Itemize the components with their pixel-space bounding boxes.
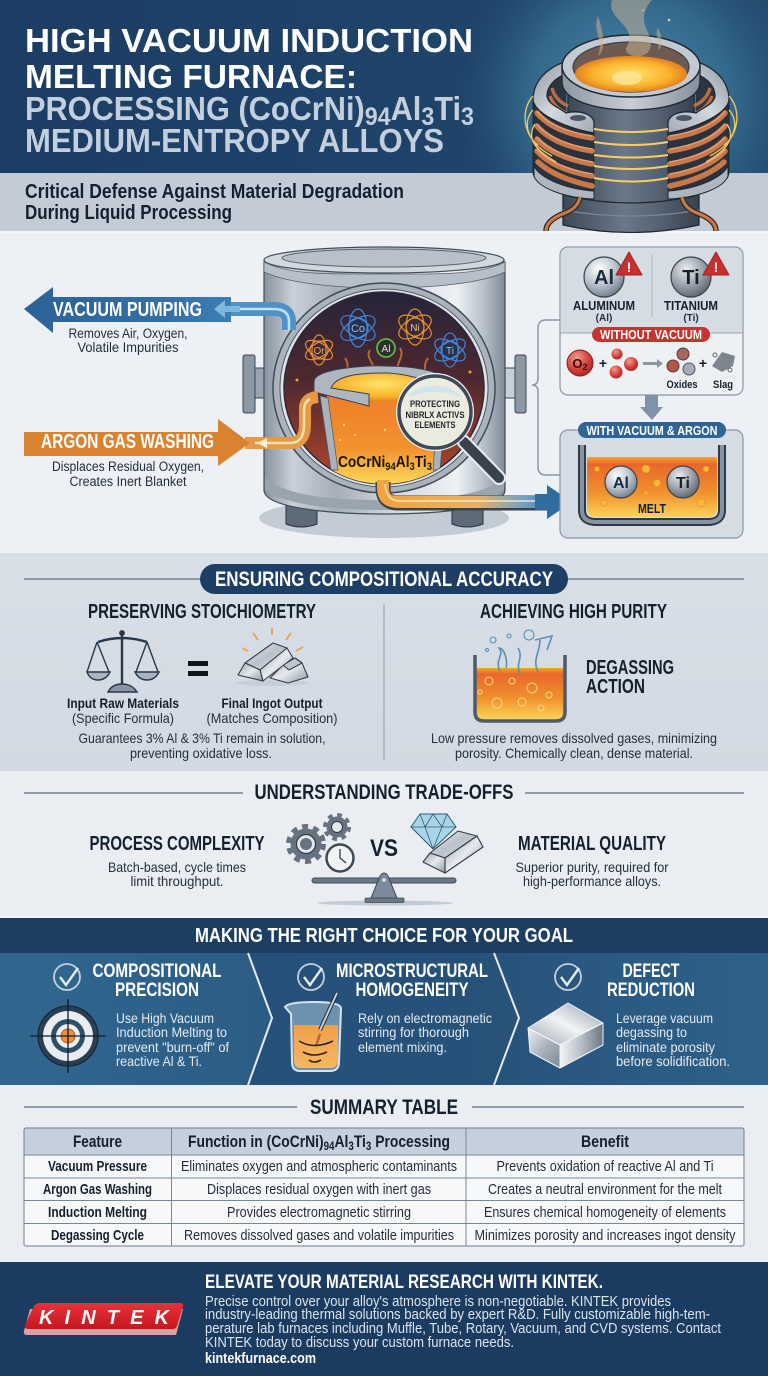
card: defect reduction: eliminate porosity — [616, 1039, 715, 1055]
crucible with melt: Al — [613, 475, 629, 492]
table header — [73, 1132, 629, 1153]
row: vacuum pressure: Prevents oxidation of reactive Al and Ti — [496, 1158, 714, 1175]
icon: diamond and ingot — [411, 814, 483, 873]
icon: silver ingots — [236, 628, 308, 686]
atom: Al: Al — [382, 344, 390, 355]
card: microstructural homogeneity: MICROSTRUCTURAL — [336, 961, 488, 982]
title: MEDIUM-ENTROPY ALLOYS — [25, 122, 444, 159]
atom: Ti — [431, 333, 469, 367]
argon gas washing description: Displaces Residual Oxygen, — [52, 459, 204, 474]
row: argon gas washing: Argon Gas Washing — [43, 1181, 152, 1198]
arrow: vacuum pumping: VACUUM PUMPING — [53, 299, 202, 321]
molten crucible: CoCrNi — [338, 454, 393, 471]
icon: balance beam — [312, 873, 456, 906]
row: argon gas washing: Displaces residual oxygen with inert gas — [207, 1181, 431, 1198]
table header: 94 — [324, 1139, 335, 1153]
copper leads — [546, 197, 716, 231]
row: vacuum pressure — [48, 1158, 714, 1175]
stoichiometry description: Guarantees 3% Al & 3% Ti remain in solution, — [78, 730, 326, 746]
panel: without vacuum — [560, 247, 743, 395]
subtitle: Critical Defense Against Material Degradation — [25, 181, 404, 203]
output label: Final Ingot Output — [222, 695, 323, 711]
output label — [206, 695, 338, 726]
viewing window — [273, 283, 495, 500]
molten crucible: 3 — [410, 461, 415, 473]
table header: Processing — [371, 1132, 450, 1151]
card: compositional precision: reactive Al & Ti. — [116, 1053, 202, 1069]
title: Al — [391, 90, 421, 127]
icon: solid cube — [528, 1003, 603, 1068]
icon: check — [555, 964, 581, 990]
logo: KINTEK: KINTEK — [39, 1307, 171, 1329]
copper coil assemblies — [525, 62, 737, 199]
molten crucible: Ti — [415, 454, 427, 471]
table header: Al — [335, 1132, 348, 1151]
element labels: TITANIUM — [664, 298, 718, 313]
magnifying glass: NIBRLX ACTIVS — [406, 410, 464, 421]
card: compositional precision: Use High Vacuum — [116, 1010, 214, 1026]
arrow: vacuum pumping — [24, 287, 289, 333]
material quality: Superior purity, required for — [516, 859, 669, 875]
title: PROCESSING (CoCrNi) — [25, 90, 390, 127]
argon gas washing description — [52, 459, 204, 489]
input label — [67, 695, 179, 726]
arrow: melt output pipe — [383, 480, 572, 519]
molten crucible — [314, 365, 442, 484]
versus: VS — [370, 835, 398, 862]
magnifying glass — [396, 373, 499, 478]
subtitle — [25, 181, 404, 224]
card: microstructural homogeneity: Rely on electromagnetic — [358, 1010, 492, 1026]
atom: Al — [377, 339, 395, 357]
row: degassing cycle: Degassing Cycle — [51, 1227, 144, 1244]
process complexity: PROCESS COMPLEXITY — [90, 833, 265, 855]
molten crucible: 94 — [385, 461, 397, 473]
process complexity: Batch-based, cycle times — [108, 859, 246, 875]
icon: gears and clock — [288, 815, 354, 872]
panel: with vacuum and argon — [560, 422, 743, 538]
icon: aluminum atom — [584, 252, 642, 297]
atom: Or: Or — [313, 346, 325, 357]
input label: Input Raw Materials — [67, 695, 179, 711]
card: defect reduction: REDUCTION — [607, 980, 695, 1001]
table header: Benefit — [581, 1132, 629, 1151]
material quality: high-performance alloys. — [523, 873, 661, 889]
title: 94 — [365, 103, 391, 131]
row: vacuum pressure: Vacuum Pressure — [48, 1158, 147, 1175]
section heading: SUMMARY TABLE — [310, 1096, 458, 1119]
table header: 3 — [366, 1139, 372, 1153]
vacuum chamber — [243, 247, 526, 538]
without vacuum badge: WITHOUT VACUUM — [600, 328, 702, 342]
magnifying glass: PROTECTING — [410, 399, 460, 410]
bracket connector — [532, 320, 560, 475]
logo: KINTEK — [24, 1303, 183, 1335]
output label: (Matches Composition) — [206, 710, 338, 726]
material quality: MATERIAL QUALITY — [518, 833, 666, 855]
oxidation reaction: Slag — [713, 379, 733, 391]
flames and smoke — [596, 0, 670, 56]
card: microstructural homogeneity: HOMOGENEITY — [356, 980, 469, 1001]
equals sign — [188, 661, 208, 676]
degassing action label — [586, 657, 674, 698]
atom: Ni — [395, 309, 435, 345]
section heading pill — [200, 564, 568, 594]
purity description: Low pressure removes dissolved gases, minimizing — [431, 730, 717, 746]
stoichiometry description — [78, 730, 326, 761]
icon: aluminum atom: Al — [594, 267, 614, 289]
call to action — [205, 1272, 722, 1367]
icon: aluminum atom: ! — [627, 259, 631, 275]
row: induction melting — [48, 1204, 726, 1221]
argon gas washing description: Creates Inert Blanket — [70, 474, 187, 489]
icon: titanium atom — [671, 252, 729, 297]
footer — [0, 1262, 768, 1376]
call to action: ELEVATE YOUR MATERIAL RESEARCH WITH KINTEK. — [205, 1272, 603, 1293]
row: induction melting: Provides electromagnetic stirring — [227, 1204, 411, 1221]
card: compositional precision — [30, 961, 229, 1073]
crucible with melt — [582, 445, 722, 522]
icon: titanium atom: ! — [714, 259, 718, 275]
oxidation reaction: + — [599, 355, 607, 371]
header banner — [0, 0, 768, 233]
table — [24, 1128, 744, 1246]
section: understanding trade-offs — [0, 771, 768, 916]
column: preserving stoichiometry: PRESERVING STOICHIOMETRY — [88, 601, 316, 623]
crucible with melt: MELT — [638, 502, 666, 516]
section: ensuring compositional accuracy — [0, 553, 768, 771]
purity description — [431, 730, 717, 761]
row: induction melting: Ensures chemical homogeneity of elements — [484, 1204, 726, 1221]
molten crucible: Al — [396, 454, 410, 471]
icon: induction furnace with coils — [525, 0, 737, 232]
card: compositional precision: prevent "burn-off" of — [116, 1039, 229, 1055]
subtitle: During Liquid Processing — [25, 202, 232, 224]
column: achieving high purity: ACHIEVING HIGH PURITY — [480, 601, 668, 623]
arrow: argon gas washing — [24, 397, 318, 466]
oxidation reaction — [567, 348, 735, 391]
card: microstructural homogeneity: stirring for thorough — [358, 1024, 469, 1040]
card: microstructural homogeneity — [285, 961, 492, 1071]
title: MELTING FURNACE: — [25, 58, 357, 95]
card: defect reduction: before solidification. — [616, 1053, 730, 1069]
icon: stirred beaker — [285, 993, 341, 1071]
arrow: argon gas washing: ARGON GAS WASHING — [41, 431, 214, 453]
vacuum pumping description — [68, 326, 188, 355]
icon: degassing beaker — [475, 630, 565, 721]
icon: target — [30, 999, 106, 1073]
oxidation reaction: 2 — [583, 362, 588, 372]
table header: Function in (CoCrNi) — [188, 1132, 354, 1151]
card: defect reduction: DEFECT — [622, 961, 680, 982]
icon: titanium atom: Ti — [682, 267, 700, 289]
material quality — [516, 833, 669, 889]
row: induction melting: Induction Melting — [48, 1204, 147, 1221]
atom: Co: Co — [351, 323, 365, 335]
element labels: ALUMINUM — [573, 298, 635, 313]
table header: Feature — [73, 1132, 122, 1151]
section heading: UNDERSTANDING TRADE-OFFS — [254, 781, 514, 804]
card: compositional precision: PRECISION — [115, 980, 199, 1001]
card: microstructural homogeneity: element mixing. — [358, 1039, 447, 1055]
title: 3 — [421, 103, 434, 131]
table header: 3 — [348, 1139, 354, 1153]
purity description: porosity. Chemically clean, dense material. — [455, 745, 693, 761]
column: achieving high purity — [431, 601, 717, 761]
oxidation reaction: + — [699, 355, 707, 371]
atom: Ni: Ni — [410, 323, 420, 334]
crucible mouth — [562, 66, 700, 110]
card: defect reduction — [528, 961, 730, 1069]
title: Ti — [434, 90, 461, 127]
input label: (Specific Formula) — [72, 710, 174, 726]
icon: check — [54, 964, 80, 990]
main process section — [24, 233, 744, 539]
atom: Or — [303, 335, 335, 365]
stoichiometry description: preventing oxidative loss. — [130, 745, 272, 761]
card: compositional precision: COMPOSITIONAL — [92, 961, 222, 982]
call to action: Precise control over your alloy's atmosphere is non-negotiable. KINTEK provides — [205, 1293, 671, 1310]
column: preserving stoichiometry — [67, 601, 338, 761]
oxidation reaction: O — [572, 356, 583, 371]
band heading: MAKING THE RIGHT CHOICE FOR YOUR GOAL — [195, 925, 573, 947]
table header: Ti — [354, 1132, 366, 1151]
degassing action label: ACTION — [586, 676, 645, 698]
title: 3 — [461, 103, 474, 131]
with vacuum and argon badge: WITH VACUUM & ARGON — [586, 424, 718, 438]
element labels: (Al) — [596, 313, 612, 324]
card: defect reduction: Leverage vacuum — [616, 1010, 713, 1026]
section: summary table — [0, 1085, 768, 1262]
arrow: down between panels — [640, 395, 663, 420]
oxidation reaction: Oxides — [666, 379, 698, 391]
glowing induction lines — [594, 129, 668, 182]
icon: check — [298, 964, 324, 990]
side flanges — [243, 355, 526, 413]
card: defect reduction: degassing to — [616, 1024, 687, 1040]
atom: Co — [337, 309, 379, 347]
atom: Ti: Ti — [446, 346, 454, 357]
element labels: (Ti) — [683, 313, 699, 324]
magnifying glass: ELEMENTS — [414, 420, 456, 431]
row: argon gas washing — [43, 1181, 723, 1198]
call to action: industry-leading thermal solutions backed by expert R&D. Fully customizable high-tem- — [205, 1306, 710, 1323]
molten crucible: 3 — [427, 461, 432, 473]
section: making the right choice — [0, 916, 768, 1085]
call to action: KINTEK today to discuss your custom furnace needs. — [205, 1334, 514, 1351]
title: HIGH VACUUM INDUCTION — [25, 22, 473, 59]
crucible with melt: Ti — [676, 475, 690, 492]
element labels — [573, 298, 718, 324]
call to action: kintekfurnace.com — [205, 1350, 316, 1367]
process complexity: limit throughput. — [130, 873, 224, 889]
vacuum pumping description: Removes Air, Oxygen, — [68, 326, 188, 341]
section heading pill: ENSURING COMPOSITIONAL ACCURACY — [215, 568, 553, 591]
chamber legs — [286, 500, 483, 527]
degassing action label: DEGASSING — [586, 657, 674, 679]
icon: balance scale — [87, 631, 159, 692]
row: argon gas washing: Creates a neutral environment for the melt — [488, 1181, 723, 1198]
row: degassing cycle: Removes dissolved gases and volatile impurities — [184, 1227, 454, 1244]
card: compositional precision: Induction Melting to — [116, 1024, 227, 1040]
chamber body — [264, 262, 505, 514]
row: vacuum pressure: Eliminates oxygen and atmospheric contaminants — [181, 1158, 457, 1175]
process complexity — [90, 833, 265, 889]
band heading — [0, 918, 768, 953]
row: degassing cycle — [51, 1227, 736, 1244]
title — [25, 22, 474, 159]
vacuum pumping description: Volatile Impurities — [78, 340, 179, 355]
